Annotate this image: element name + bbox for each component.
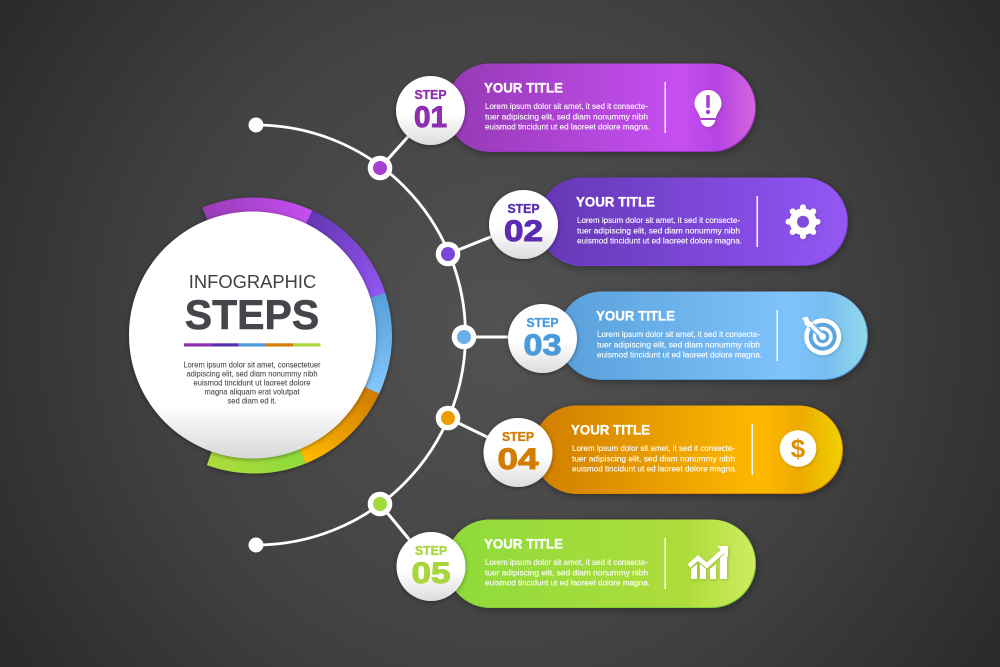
badge 4 <box>484 418 552 487</box>
icon: dollar coin: $ <box>791 434 806 464</box>
badge 1: STEP <box>414 88 446 102</box>
title 1: YOUR TITLE <box>484 80 563 96</box>
icon: growth chart <box>689 546 728 579</box>
badge 3: STEP <box>526 316 558 330</box>
central body text: sed diam ed it. <box>228 396 276 405</box>
node 3 <box>452 325 476 349</box>
body 2: tuer adipiscing elit, sed diam nonummy nibh <box>577 226 740 235</box>
icon: target <box>802 316 841 355</box>
badge 1 <box>396 76 465 145</box>
pill 5 <box>446 520 756 608</box>
divider 1 <box>664 82 666 133</box>
body 1: Lorem ipsum dolor sit amet, it sed it consecte- <box>485 102 648 111</box>
panel: step 3 <box>508 292 868 380</box>
badge 2: 02 <box>504 215 543 248</box>
coloured ring <box>206 207 383 464</box>
body 1 <box>485 102 650 132</box>
badge 4: STEP <box>502 430 534 444</box>
badge 5: 05 <box>412 557 450 590</box>
arc end dot <box>248 538 264 552</box>
badge 5: STEP <box>415 544 447 558</box>
divider 5 <box>664 538 666 589</box>
heading: infographic: INFOGRAPHIC <box>189 272 316 292</box>
body 2: euismod tincidunt ut ed laoreet dolore magna. <box>577 237 742 246</box>
central body text: magna aliquam erat volutpat <box>204 387 300 396</box>
body 4: tuer adipiscing elit, sed diam nonummy nibh <box>572 454 735 463</box>
pill 3 <box>558 292 868 380</box>
body 3: euismod tincidunt ut ed laoreet dolore magna. <box>597 351 762 360</box>
timeline arc with nodes <box>248 111 542 566</box>
badge 2: STEP <box>508 202 540 216</box>
node 4 <box>436 406 460 430</box>
central body text: Lorem ipsum dolor sit amet, consectetuer <box>184 360 321 369</box>
title 3: YOUR TITLE <box>596 308 675 324</box>
pill 2 <box>538 178 848 266</box>
icon: gear <box>788 207 818 236</box>
body 4: Lorem ipsum dolor sit amet, it sed it consecte- <box>572 444 735 453</box>
panel: step 1 <box>396 64 756 152</box>
node 2 <box>436 242 460 266</box>
arc start dot <box>248 118 264 132</box>
white disc <box>129 212 376 458</box>
central body text: adipiscing elit, sed diam nonummy nibh <box>186 369 318 378</box>
divider 3 <box>776 310 778 361</box>
divider 2 <box>756 196 758 247</box>
badge 1: 01 <box>414 101 447 134</box>
title 4: YOUR TITLE <box>571 422 650 438</box>
body 3: Lorem ipsum dolor sit amet, it sed it consecte- <box>597 330 760 339</box>
body 4: euismod tincidunt ut ed laoreet dolore magna. <box>572 465 737 474</box>
pill 1 <box>446 64 756 152</box>
panel: step 2 <box>489 178 848 266</box>
body 5 <box>485 558 650 588</box>
central body text <box>184 360 321 405</box>
node 5 <box>368 492 392 516</box>
panel: step 5 <box>396 520 756 608</box>
icon: dollar coin <box>780 430 816 467</box>
body 1: tuer adipiscing elit, sed diam nonummy nibh <box>485 112 648 121</box>
pill 4 <box>533 406 843 494</box>
body 4 <box>572 444 737 474</box>
badge 4: 04 <box>498 443 539 476</box>
body 2: Lorem ipsum dolor sit amet, it sed it consecte- <box>577 216 740 225</box>
badge 3: 03 <box>524 329 562 362</box>
colour bar <box>184 343 320 346</box>
icon: light bulb <box>694 90 722 127</box>
title 2: YOUR TITLE <box>576 194 655 210</box>
central body text: euismod tincidunt ut laoreet dolore <box>194 378 310 387</box>
central circle with coloured ring <box>129 207 383 464</box>
body 1: euismod tincidunt ut ed laoreet dolore magna. <box>485 123 650 132</box>
body 5: Lorem ipsum dolor sit amet, it sed it consecte- <box>485 558 648 567</box>
body 5: euismod tincidunt ut ed laoreet dolore magna. <box>485 579 650 588</box>
connector lines <box>380 111 542 566</box>
title 5: YOUR TITLE <box>484 536 563 552</box>
main arc line <box>256 125 466 545</box>
body 3: tuer adipiscing elit, sed diam nonummy nibh <box>597 340 760 349</box>
body 2 <box>577 216 742 246</box>
node 1 <box>368 156 392 180</box>
body 5: tuer adipiscing elit, sed diam nonummy nibh <box>485 568 648 577</box>
badge 3 <box>508 304 577 373</box>
divider 4 <box>752 424 753 475</box>
panel: step 4 <box>484 406 843 494</box>
badge 2 <box>489 190 558 259</box>
body 3 <box>597 330 762 360</box>
badge 5 <box>396 532 466 601</box>
heading: steps: STEPS <box>185 291 319 338</box>
